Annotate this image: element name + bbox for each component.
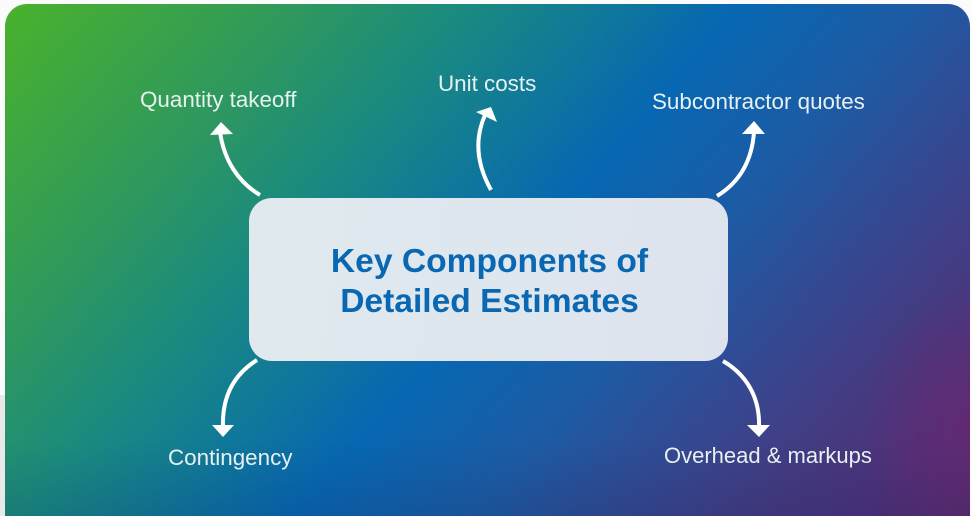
label: overhead and markups: Overhead & markups <box>664 443 872 468</box>
label: quantity takeoff: Quantity takeoff <box>140 87 296 112</box>
arrow: to overhead and markups <box>723 361 770 437</box>
title: Detailed Estimates <box>340 283 639 320</box>
label: subcontractor quotes: Subcontractor quotes <box>652 89 865 114</box>
label: contingency: Contingency <box>168 445 292 470</box>
page edge strip <box>0 395 5 516</box>
center box: key components <box>249 198 728 361</box>
arrow: to quantity takeoff <box>210 122 260 195</box>
label: unit costs: Unit costs <box>438 71 536 96</box>
arrow: to contingency <box>212 360 257 437</box>
arrow: to subcontractor quotes <box>717 121 765 196</box>
arrow: to unit costs <box>476 107 497 190</box>
title: Key Components of <box>331 243 648 280</box>
title <box>331 243 648 320</box>
